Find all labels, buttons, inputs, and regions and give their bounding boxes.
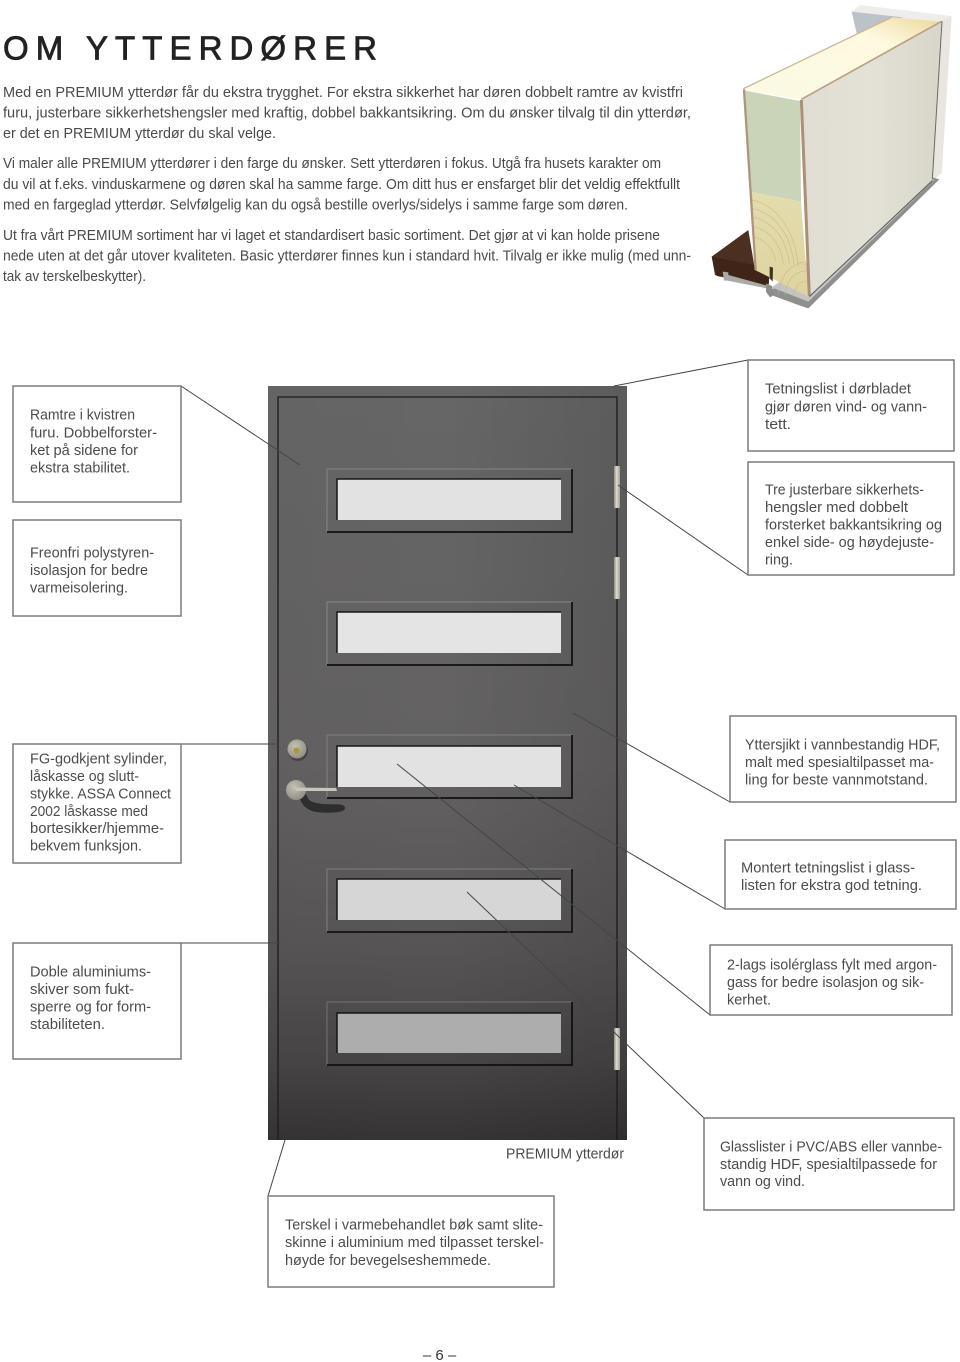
callout: tetningslist: Tetningslist i dørbladet: [765, 382, 911, 398]
callout: isolasjon: varmeisolering.: [30, 580, 128, 596]
leader lines: [181, 360, 748, 1196]
callout: sylinder: bortesikker/hjemme-: [30, 821, 164, 837]
intro text block: Vi maler alle PREMIUM ytterdører i den farge du ønsker. Sett ytterdøren i fokus. Utgå fra husets karakter om: [3, 156, 661, 172]
callout: hengsler: ring.: [765, 552, 793, 568]
window 4: [327, 869, 572, 932]
callout: terskel: [268, 1196, 554, 1287]
intro text block: Med en PREMIUM ytterdør får du ekstra trygghet. For ekstra sikkerhet har døren dobbelt ramtre av kvistfri: [3, 85, 683, 101]
callout: glasslister: [704, 1118, 954, 1210]
window 2: [327, 602, 572, 665]
callout: terskel: høyde for bevegelseshemmede.: [285, 1253, 491, 1269]
intro text block: du vil at f.eks. vinduskarmene og døren skal ha samme farge. Om ditt hus er ensfarget blir det veldig effektfullt: [3, 177, 680, 193]
callout: tetningslist: gjør døren vind- og vann-: [765, 400, 927, 416]
intro text block: furu, justerbare sikkerhetshengsler med kraftig, dobbel bakkantsikring. Om du ønsker tilvalg til din ytterdør,: [3, 106, 691, 122]
callout: isolerglass: 2-lags isolérglass fylt med argon-: [727, 958, 937, 974]
window 5: [327, 1002, 572, 1065]
callout: tetningslist: tett.: [765, 417, 791, 433]
callout: glasslist tetning: listen for ekstra god tetning.: [741, 878, 922, 894]
callout: sylinder: [13, 744, 181, 863]
callout: hengsler: enkel side- og høydejuste-: [765, 535, 934, 551]
callout: aluminiumsskiver: skiver som fukt-: [30, 982, 134, 998]
callout: tetningslist: [748, 360, 954, 451]
callout: isolasjon: [13, 520, 181, 616]
door caption: PREMIUM ytterdør: [506, 1146, 624, 1162]
icon: door handle: [286, 780, 345, 813]
callout: isolerglass: kerhet.: [727, 992, 771, 1008]
callout: yttersjikt: ling for beste vannmotstand.: [745, 772, 928, 788]
callout: aluminiumsskiver: stabiliteten.: [30, 1017, 105, 1033]
intro text block: [3, 85, 691, 285]
intro text block: nede uten at det går utover kvaliteten. Basic ytterdører finnes kun i standard hvit. Tilvalg er ikke mulig (med unn-: [3, 248, 691, 264]
callout: isolerglass: [710, 945, 952, 1015]
callout: ramtre: furu. Dobbelforster-: [30, 426, 157, 442]
callout: ramtre: Ramtre i kvistren: [30, 408, 135, 424]
callout: glasslist tetning: Montert tetningslist i glass-: [741, 860, 915, 876]
icon: cylinder lock: [288, 740, 308, 761]
window 3: [327, 735, 572, 798]
callout: hengsler: forsterket bakkantsikring og: [765, 518, 942, 534]
callout: hengsler: Tre justerbare sikkerhets-: [765, 482, 924, 498]
callout: glasslister: standig HDF, spesialtilpassede for: [720, 1157, 937, 1173]
callout: sylinder: stykke. ASSA Connect: [30, 786, 171, 802]
callout: aluminiumsskiver: sperre og for form-: [30, 1000, 151, 1016]
intro text block: er det en PREMIUM ytterdør du skal velge.: [3, 126, 276, 142]
intro text block: med en fargeglad ytterdør. Selvfølgelig kan du også bestille overlys/sidelys i samme farge som døren.: [3, 198, 628, 214]
callout: glasslister: vann og vind.: [720, 1174, 805, 1190]
callout: sylinder: bekvem funksjon.: [30, 838, 142, 854]
callout: aluminiumsskiver: Doble aluminiums-: [30, 964, 151, 980]
intro text block: Ut fra vårt PREMIUM sortiment har vi laget et standardisert basic sortiment. Det gjør at vi kan holde prisene: [3, 228, 660, 244]
callout: hengsler: [748, 462, 954, 575]
callout: hengsler: hengsler med dobbelt: [765, 500, 908, 516]
callout: yttersjikt: malt med spesialtilpasset ma-: [745, 755, 934, 771]
door: [268, 386, 627, 1140]
callout: isolerglass: gass for bedre isolasjon og sik-: [727, 975, 924, 991]
title: OM YTTERDØRER: [3, 30, 377, 66]
icon: hinges: [614, 466, 620, 1070]
callout: isolasjon: isolasjon for bedre: [30, 563, 148, 579]
callout: ramtre: ekstra stabilitet.: [30, 460, 130, 476]
callout: terskel: skinne i aluminium med tilpasset terskel-: [285, 1235, 544, 1251]
callout: terskel: Terskel i varmebehandlet bøk samt slite-: [285, 1218, 543, 1234]
callout: ramtre: [13, 386, 181, 502]
callout: sylinder: 2002 låskasse med: [30, 804, 148, 820]
callout: ramtre: ket på sidene for: [30, 443, 138, 459]
callout: yttersjikt: [730, 716, 956, 802]
window 1: [327, 469, 572, 532]
callout: aluminiumsskiver: [13, 943, 181, 1059]
callout: sylinder: FG-godkjent sylinder,: [30, 752, 167, 768]
intro text block: tak av terskelbeskytter).: [3, 269, 146, 285]
callout: isolasjon: Freonfri polystyren-: [30, 546, 154, 562]
callout: glasslist tetning: [725, 840, 956, 909]
door leaf outline: [278, 397, 617, 1140]
callout: yttersjikt: Yttersjikt i vannbestandig HDF,: [745, 738, 940, 754]
callout: sylinder: låskasse og slutt-: [30, 769, 139, 785]
callout: glasslister: Glasslister i PVC/ABS eller vannbe-: [720, 1140, 942, 1156]
door cross-section illustration: [712, 5, 952, 308]
